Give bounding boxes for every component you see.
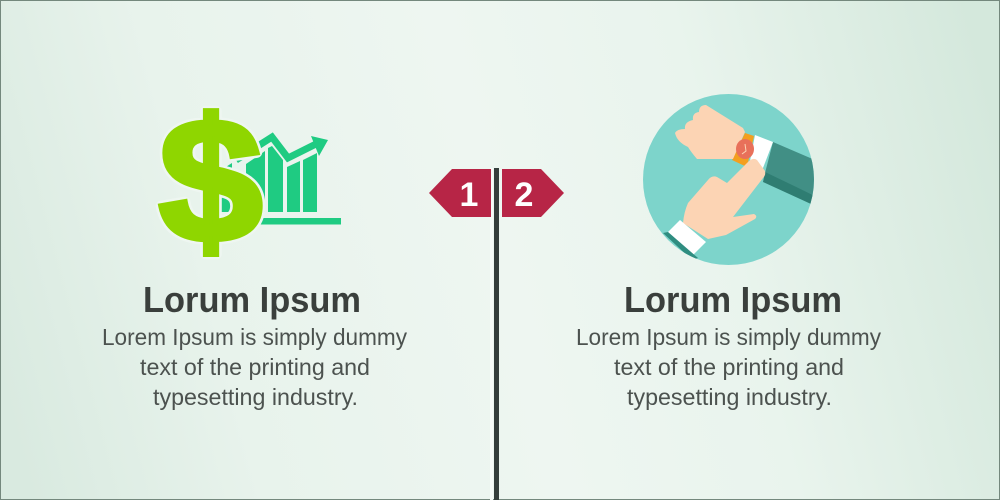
marker 2: [502, 169, 564, 217]
dollar glyph: $: [159, 84, 262, 279]
watch face: [736, 139, 754, 159]
watch strap: [732, 133, 754, 167]
upper hand: [675, 105, 745, 159]
icon: dollar sign with growth chart: [159, 84, 341, 279]
chart bars: [218, 146, 341, 224]
right body text: Lorem Ipsum is simply dummy: [576, 324, 881, 350]
upper sleeve: [765, 142, 815, 196]
right heading: Lorum Ipsum: [624, 279, 842, 320]
right body text: typesetting industry.: [627, 384, 832, 410]
right body text: [576, 324, 881, 410]
lower cuff: [668, 220, 706, 255]
left body text: [102, 324, 407, 410]
upper cuff: [750, 135, 773, 168]
left body text: typesetting industry.: [153, 384, 358, 410]
teal circle: [643, 94, 814, 265]
dollar glyph: $: [159, 84, 262, 279]
left body text: Lorem Ipsum is simply dummy: [102, 324, 407, 350]
marker 1: [429, 169, 491, 217]
marker 2: 2: [515, 176, 533, 214]
marker 1: 1: [460, 176, 478, 214]
left body text: text of the printing and: [140, 354, 370, 380]
right body text: text of the printing and: [614, 354, 844, 380]
icon: checking wristwatch: [643, 94, 815, 265]
lower hand: [683, 159, 765, 239]
center divider pole: [490, 168, 499, 500]
lower sleeve: [663, 232, 698, 260]
left heading: Lorum Ipsum: [143, 279, 361, 320]
chart arrow: [236, 136, 328, 160]
